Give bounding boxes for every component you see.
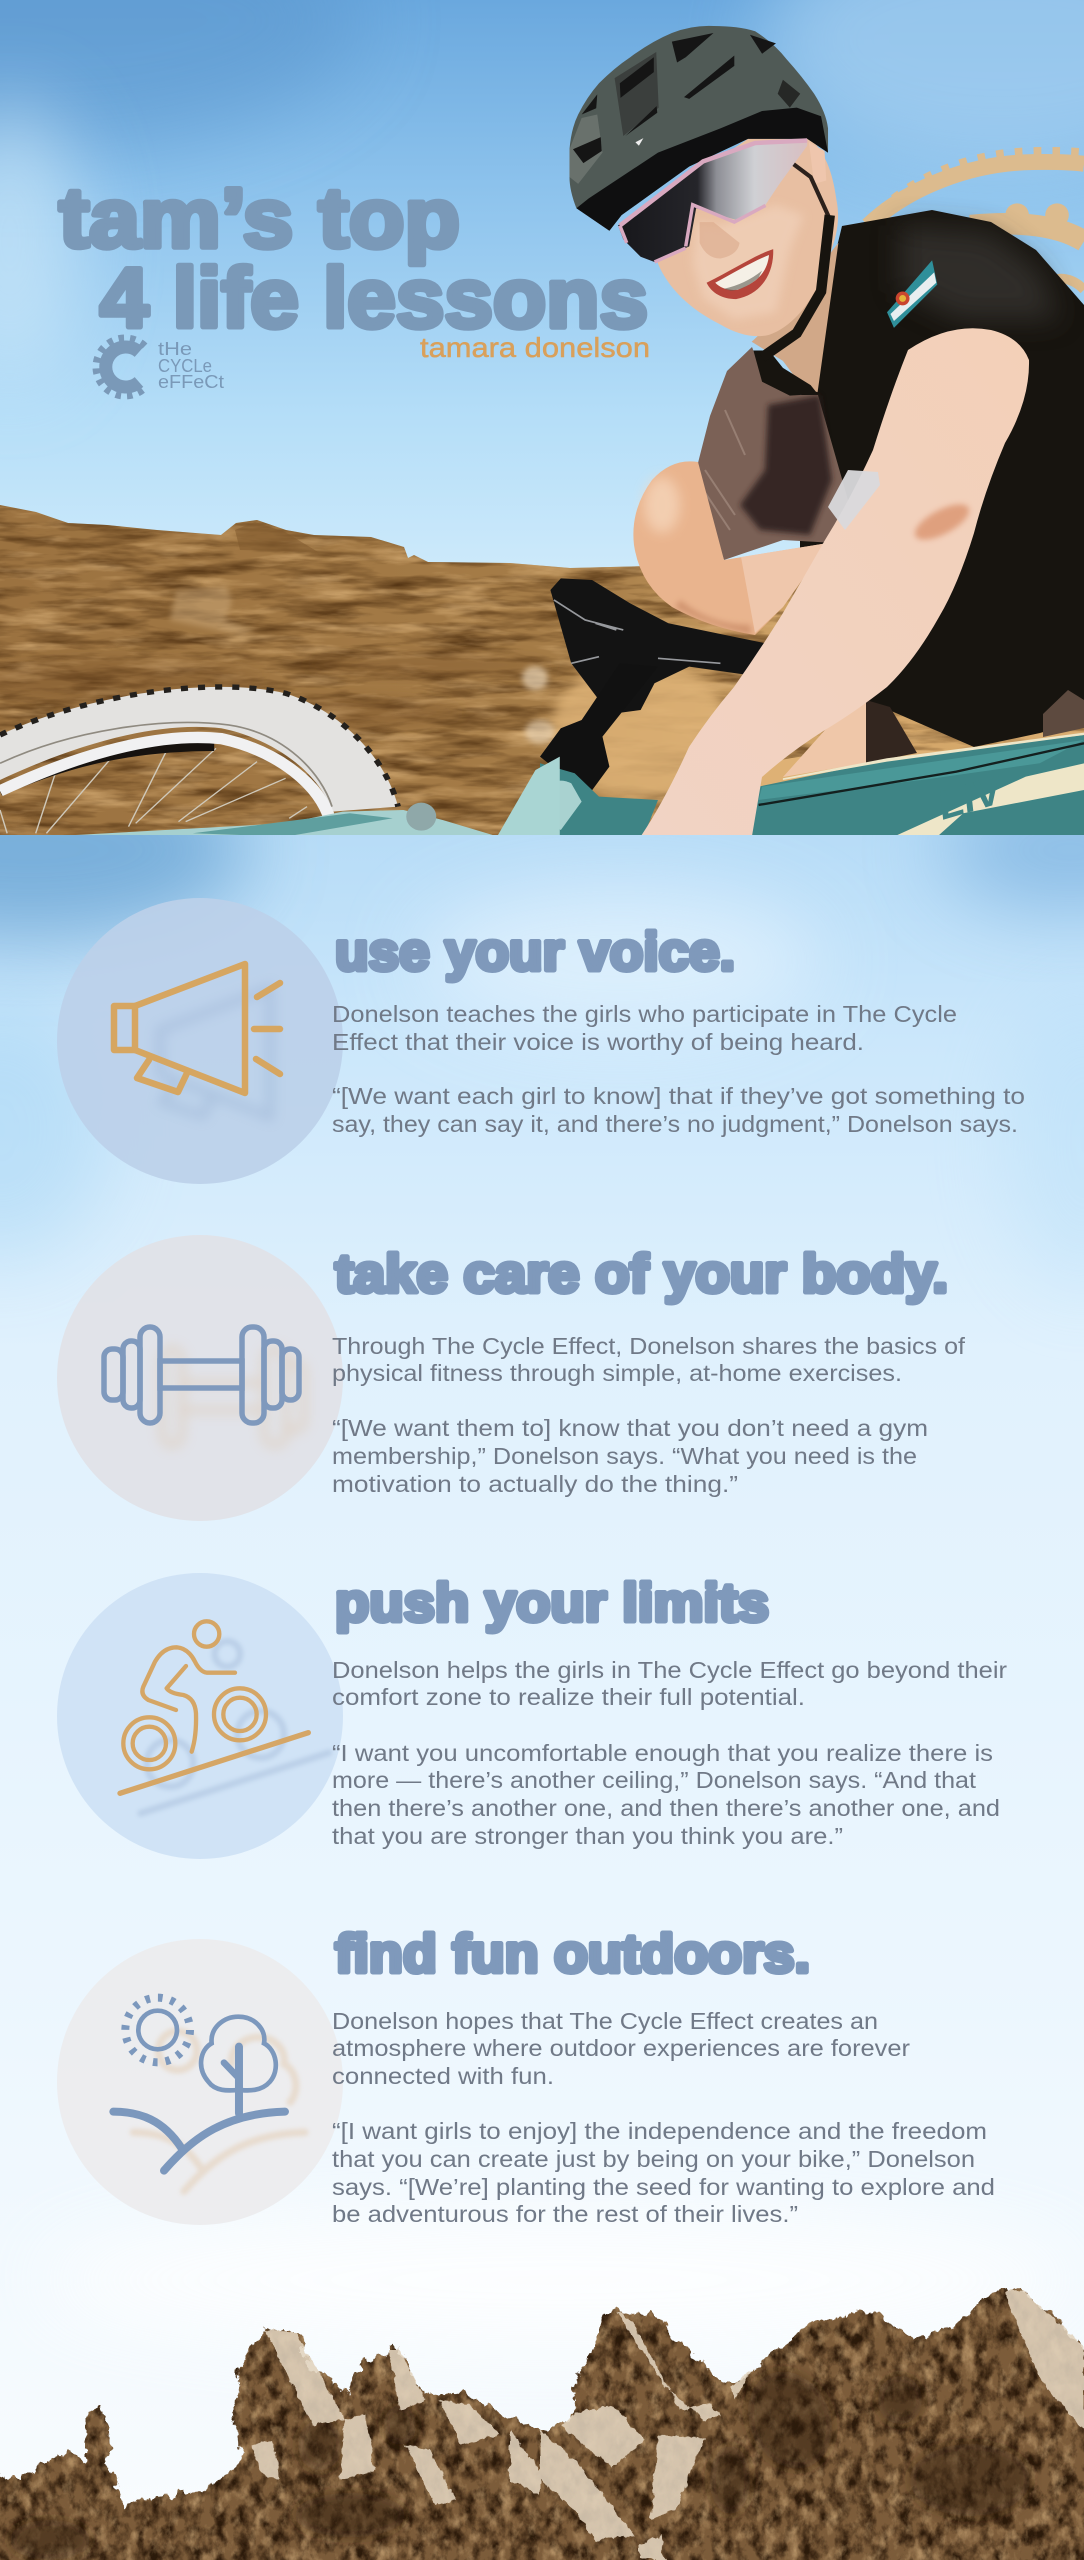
body text [332,1657,1007,1849]
body text: “[We want each girl to know] that if they’ve got something to [332,1083,1025,1109]
body text: physical fitness through simple, at-home exercises. [332,1360,902,1386]
light rock faces [252,2290,1084,2560]
desert ground [0,505,1084,836]
bike frame: LIV [931,766,1011,828]
seat post [540,697,622,790]
logo mark [96,338,145,396]
icon circle: sun tree hill [57,1939,343,2225]
heading: push your limits [335,1573,769,1633]
body text: Donelson teaches the girls who participate in The Cycle [332,1001,957,1027]
section 1: use your voice [57,898,1025,1184]
logo text: eFFeCt [158,372,224,392]
body text: connected with fun. [332,2063,554,2089]
hero photo panel [0,0,1084,837]
body text: that you are stronger than you think you are.” [332,1823,843,1849]
body text: “[We want them to] know that you don’t need a gym [332,1415,928,1441]
helmet [569,26,828,231]
bicycle saddle [540,578,766,795]
body text: “[I want girls to enjoy] the independence and the freedom [332,2118,987,2144]
body text [332,1333,966,1497]
heading: take care of your body. [335,1244,948,1304]
bike frame [46,733,1084,837]
face [644,139,838,336]
brown tee [698,347,848,560]
body text: motivation to actually do the thing.” [332,1471,738,1497]
title [59,171,648,345]
body text: says. “[We’re] planting the seed for wanting to explore and [332,2174,995,2200]
body text: more — there’s another ceiling,” Donelson says. “And that [332,1767,977,1793]
body text [332,1001,1025,1137]
body text: Donelson helps the girls in The Cycle Effect go beyond their [332,1657,1007,1683]
logo: the cycle effect [96,338,224,396]
section 2: take care of your body [57,1235,966,1521]
black jersey [800,210,1084,747]
lower sky background [0,760,1084,2560]
forearm and hand [641,328,1029,836]
sunglasses [618,141,807,262]
body text: Effect that their voice is worthy of being heard. [332,1029,864,1055]
heading: find fun outdoors. [335,1924,810,1984]
logo text [158,339,224,392]
mouth [707,249,773,299]
subtitle: tamara donelson: tamara donelson [420,332,650,363]
rear wheel of bike [0,687,398,833]
body text: membership,” Donelson says. “What you need is the [332,1443,917,1469]
body text: atmosphere where outdoor experiences are forever [332,2035,910,2061]
body text: be adventurous for the rest of their lives.” [332,2201,798,2227]
knee and leg [633,461,828,635]
logo text: CYCLe [158,356,212,376]
body text: “I want you uncomfortable enough that you realize there is [332,1740,993,1766]
icon circle: dumbbell [57,1235,343,1521]
colorado flag sleeve patch [887,260,937,328]
body text: that you can create just by being on your bike,” Donelson [332,2146,975,2172]
dark rock shadows [10,2358,1030,2560]
rider [569,26,1084,777]
body text: Donelson hopes that The Cycle Effect creates an [332,2008,878,2034]
body text: Through The Cycle Effect, Donelson shares the basics of [332,1333,966,1359]
body text: then there’s another one, and then there’s another one, and [332,1795,1000,1821]
section 3: push your limits [57,1573,1007,1859]
icon circle: megaphone [57,898,343,1184]
title: tam’s top [59,171,460,265]
body text: say, they can say it, and there’s no judgment,” Donelson says. [332,1111,1018,1137]
icon circle: cyclist on slope [57,1573,343,1859]
body text: comfort zone to realize their full potential. [332,1684,805,1710]
neck [569,26,838,396]
ear hair [748,138,828,152]
title: 4 life lessons [100,251,648,345]
section 4: find fun outdoors [57,1924,995,2227]
heading: use your voice. [335,922,735,982]
rocky mountains [0,2288,1084,2560]
logo text: tHe [158,339,192,359]
body text [332,2008,995,2227]
shorts patch [1043,690,1084,737]
gear graphic behind rider [868,152,1084,290]
